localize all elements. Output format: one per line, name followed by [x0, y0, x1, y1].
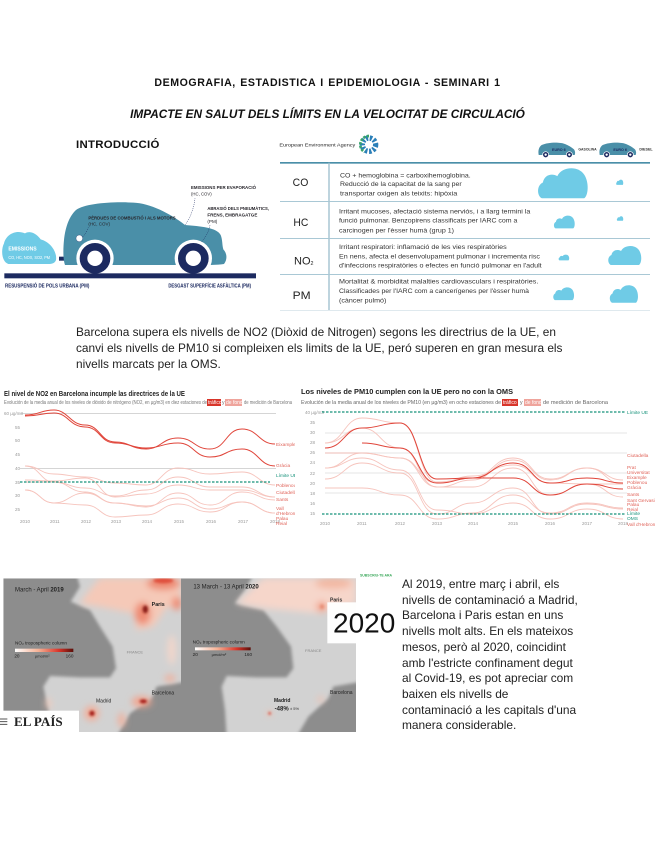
row: CO: CO + hemoglobina = carboxihemoglobina. — [340, 172, 471, 179]
chart subtitle: de fondo — [226, 400, 246, 406]
axis labels: 2017 — [582, 521, 593, 526]
axis labels: 45 — [15, 452, 21, 457]
axis labels: 2015 — [508, 521, 519, 526]
row: CO — [293, 168, 623, 198]
station labels: d'Hebron — [276, 511, 295, 517]
panel: 2019 map: 20 — [14, 653, 20, 658]
label: asphalt wear: DESGAST SUPERFÍCIE ASFÀLTICA (PM) — [168, 282, 251, 290]
icon: euro 6 diesel car — [599, 143, 636, 158]
panel: 2019 map: Madrid — [96, 699, 112, 705]
station labels: Palau — [276, 516, 289, 522]
axis labels: 2016 — [206, 519, 217, 524]
station labels: Gràcia — [276, 463, 290, 469]
axis labels: 35 — [15, 480, 21, 485]
axis labels: 28 — [310, 440, 316, 445]
axis labels: 55 — [15, 425, 21, 430]
label: evaporation — [191, 183, 256, 197]
icon: front wheel — [175, 240, 212, 277]
label: diesel: DIESEL — [639, 147, 653, 152]
station labels: Prat — [627, 465, 636, 471]
label: abrasion: FRENS, EMBRAGATGE — [207, 212, 257, 217]
row: HC: funció pulmonar. Benzopirens classificats per IARC com a — [339, 218, 518, 225]
text block: Barcelona levels — [76, 325, 562, 371]
axis labels: 50 — [15, 438, 21, 443]
strong traffic station lines — [325, 423, 623, 495]
station labels: Límite UE — [627, 410, 648, 416]
chart subtitle: y — [520, 400, 523, 406]
label: fuel losses: (HC, COV) — [88, 222, 110, 227]
station labels: Sants — [627, 492, 640, 498]
station labels: Gràcia — [627, 485, 641, 491]
axis labels — [4, 411, 281, 524]
axis labels: 25 — [15, 507, 21, 512]
panel: 2020 map: ± 5% — [290, 706, 300, 711]
axis labels: 2012 — [395, 521, 406, 526]
exhaust pipe — [59, 257, 66, 261]
axis labels — [305, 410, 629, 526]
chart subtitle: y — [222, 400, 225, 406]
map comparison: NO2 Europe 2019 vs 2020 — [0, 574, 395, 732]
panel: 2020 map: 160 — [244, 652, 253, 657]
text block: 2019 vs 2020 contamination: al Covid-19, es pot apreciar com — [402, 671, 573, 685]
axis labels: 40 µg/m3 — [305, 410, 324, 415]
axis labels: 2013 — [432, 521, 443, 526]
axis labels: 15 — [310, 511, 316, 516]
panel: 2020 map: Barcelona — [330, 690, 353, 696]
text block: Barcelona levels: canvi els nivells de PM10 si compleixen els limits de la UE, peró superen en gran mesura els — [76, 341, 562, 355]
axis labels: 20 — [310, 481, 316, 486]
table rules — [280, 162, 650, 311]
row: HC: HC — [293, 217, 308, 229]
station labels: Palau — [627, 502, 640, 508]
panel: 2019 map: Barcelona — [152, 690, 174, 696]
station labels: Sant Gervasi — [627, 498, 655, 504]
row: CO: CO — [293, 177, 308, 189]
axis labels: 2010 — [320, 521, 331, 526]
axis labels: 35 — [310, 420, 316, 425]
axis labels: 24 — [310, 460, 316, 465]
text block: 2019 vs 2020 contamination: mesos, però al 2020, coincidint — [402, 640, 566, 654]
panel: 2020 map: µmol/m² — [212, 652, 227, 657]
icon: euro 6 petrol car — [538, 143, 575, 158]
panel: 2019 map — [3, 578, 181, 732]
axis labels: 30 — [310, 430, 316, 435]
chart: PM10 levels in Barcelona — [301, 387, 655, 528]
axis labels: 2011 — [50, 519, 60, 524]
row: NO2: Irritant respiratori: inflamació de les vies respiratòries — [339, 244, 507, 251]
row: HC — [293, 208, 623, 234]
EU limit line — [20, 481, 270, 483]
panel: 2020 map: 20 — [193, 652, 198, 657]
text block: 2019 vs 2020 contamination: nivells molt alts. En els mateixos — [402, 624, 573, 638]
axis labels: 2014 — [468, 521, 479, 526]
label: abrasion: (PM) — [207, 219, 218, 224]
axis labels: 2013 — [111, 519, 122, 524]
axis labels: 40 — [15, 466, 21, 471]
row: PM — [293, 279, 638, 304]
station labels: Reial — [276, 521, 287, 527]
row: NO2: NO — [294, 255, 310, 267]
axis labels: 2012 — [81, 519, 92, 524]
label: evaporation: EMISSIONS PER EVAPORACIÓ — [191, 183, 256, 190]
row: CO: transportar oxigen als teixits: hipòxia — [340, 191, 458, 198]
diagram: car emission sources — [2, 183, 269, 290]
row: NO2: d'infeccions respiratòries o efectes en funció pulmonar en l'adult — [339, 263, 542, 270]
icon: exhaust cloud: CO, HC, NOX, SO2, PM — [8, 255, 50, 260]
axis labels: 26 — [310, 450, 316, 455]
icon: exhaust cloud — [2, 232, 56, 264]
axis labels: 2016 — [545, 521, 556, 526]
chart subtitle: tráfico — [503, 400, 517, 406]
panel: 2020 map: Madrid — [274, 698, 290, 704]
panel: 2020 map: NO₂ tropospheric column — [193, 639, 245, 644]
row: PM: Mortalitat & morbiditat malalties cardiovasculars i respiratòries. — [339, 279, 538, 286]
panel: 2019 map: March - April 2019 — [15, 588, 64, 594]
text block: Barcelona levels: nivells marcats per la OMS. — [76, 357, 221, 371]
fuel cap marker — [76, 235, 83, 242]
chart subtitle: Evolución de la media anual de los niveles de dióxido de nitrógeno (NO2, en µg/m3) en diez estaciones de — [4, 400, 207, 406]
panel: 2020 map: -48% — [275, 706, 289, 712]
icon: rear wheel — [76, 240, 114, 277]
heading: introducció: INTRODUCCIÓ — [76, 139, 160, 151]
axis labels: 2015 — [174, 519, 185, 524]
pale background station lines — [25, 466, 275, 517]
row: CO: Reducció de la capacitat de la sang per — [340, 181, 462, 188]
station labels — [276, 442, 298, 527]
axis labels: 22 — [310, 471, 316, 476]
label: evaporation: (HC, COV) — [191, 192, 212, 197]
chart subtitle: de medición de Barcelona — [543, 400, 608, 406]
table: pollutants and health effects — [279, 134, 653, 311]
icon: euro 6 diesel car: EURO 6 — [613, 148, 627, 152]
icon: car body — [63, 202, 226, 265]
chart subtitle: Evolución de la media anual de los niveles de PM10 (en µg/m3) en ocho estaciones de — [301, 400, 501, 406]
station labels: Poblenou — [627, 480, 648, 486]
station labels: Universitat — [627, 470, 650, 476]
icon: exhaust cloud: EMISSIONS — [8, 247, 37, 253]
station labels: Sants — [276, 497, 289, 503]
label: petrol: GASOLINA — [578, 147, 597, 152]
label: fuel losses — [88, 213, 176, 227]
logo: European Environment Agency — [279, 136, 376, 152]
row: NO2: En nens, afecta el desenvolupament pulmonar i incrementa risc — [339, 253, 541, 260]
axis labels: 2017 — [238, 519, 249, 524]
panel: 2020 map: FRANCE — [305, 648, 322, 653]
chart subtitle: tráfico — [208, 400, 222, 406]
road — [4, 273, 256, 278]
text block: 2019 vs 2020 contamination — [402, 577, 578, 732]
station labels: Vall — [276, 506, 284, 512]
text block: Barcelona levels: Barcelona supera els nivells de NO2 (Diòxid de Nitrogen) segons les directrius de la UE, en — [76, 325, 556, 339]
grid — [325, 433, 627, 493]
row: PM: Classificades per l'IARC com a cancerígenes per l'èsser humà — [339, 288, 529, 295]
panel: 2020 map — [181, 578, 356, 732]
logo: El País — [0, 711, 79, 733]
axis labels: 18 — [310, 491, 316, 496]
chart title: El nivel de NO2 en Barcelona incumple las directrices de la UE — [4, 389, 185, 398]
text block: 2019 vs 2020 contamination: manera considerable. — [402, 718, 516, 732]
small green link: SUBSCRIU-TE ARA — [360, 574, 393, 578]
panel: 2020 map: 13 March - 13 April 2020 — [193, 584, 259, 590]
text block: 2019 vs 2020 contamination: amb l'estricte confinament degut — [402, 656, 573, 670]
chart: NO2 levels in Barcelona — [4, 389, 295, 527]
text block: 2019 vs 2020 contamination: Barcelona i Paris estan en uns — [402, 608, 563, 622]
axis labels: 2014 — [142, 519, 153, 524]
station labels: Ciutadella — [627, 453, 649, 459]
axis labels: 30 — [15, 493, 21, 498]
leader lines — [83, 198, 210, 242]
panel: 2019 map: NO₂ tropospheric column — [15, 641, 67, 646]
chart subtitle — [301, 399, 608, 406]
station labels: Reial — [627, 507, 638, 513]
station labels: Eixample — [627, 475, 647, 481]
panel: 2019 map: µmol/m² — [35, 653, 50, 658]
row: NO2 — [294, 244, 641, 270]
text block: 2019 vs 2020 contamination: nivells de contaminació a Madrid, — [402, 593, 578, 607]
label: 2020 — [327, 602, 400, 643]
text block: 2019 vs 2020 contamination: baixen els nivells de — [402, 687, 508, 701]
axis labels: 16 — [310, 501, 316, 506]
station labels: OMS — [627, 516, 638, 522]
grid — [20, 414, 276, 468]
axis labels: 2018 — [618, 521, 629, 526]
axis labels: 2011 — [357, 521, 367, 526]
label: resuspension: RESUSPENSIÓ DE POLS URBANA (PM) — [5, 282, 90, 290]
logo: El País: EL PAÍS — [14, 715, 63, 729]
row: HC: carcinogen per l'èsser humà (grup 1) — [339, 227, 454, 234]
chart title: Los niveles de PM10 cumplen con la UE pero no con la OMS — [301, 387, 513, 396]
icon: euro 6 petrol car: EURO 6 — [552, 148, 566, 152]
subtitle: IMPACTE EN SALUT DELS LÍMITS EN LA VELOCITAT DE CIRCULACIÓ — [130, 107, 525, 121]
station labels: Límite — [627, 511, 640, 517]
strong traffic station lines — [25, 410, 275, 466]
pale background station lines — [325, 418, 623, 519]
panel: 2019 map: 160 — [66, 653, 74, 658]
chart subtitle: de fondo — [525, 400, 545, 406]
row: NO2: 2 — [310, 261, 314, 267]
panel: 2020 map: Paris — [330, 598, 342, 604]
title: DEMOGRAFIA, ESTADISTICA I EPIDEMIOLOGIA - SEMINARI 1 — [154, 77, 501, 89]
panel: 2019 map: Paris — [152, 602, 165, 608]
text block: 2019 vs 2020 contamination: Al 2019, entre març i abril, els — [402, 577, 559, 591]
station labels — [627, 410, 655, 528]
row: PM: (càncer pulmó) — [339, 297, 386, 304]
limit lines — [322, 412, 626, 514]
row: HC: Irritant mucoses, afectació sistema nerviós, i a llarg termini la — [339, 208, 531, 215]
station labels: Vall d'Hebron — [627, 522, 655, 528]
row: PM: PM — [293, 290, 311, 302]
logo: European Environment Agency: European Environment Agency — [279, 143, 356, 148]
panel: 2019 map: FRANCE — [127, 649, 143, 654]
label: abrasion — [207, 204, 269, 224]
axis labels: 2018 — [270, 519, 281, 524]
label: fuel losses: PÈRDUES DE COMBUSTIÓ I ALS MOTORS — [88, 213, 176, 220]
text block: 2019 vs 2020 contamination: contaminació a les capitals d'una — [402, 703, 576, 717]
axis labels: 60 µg/m3 — [4, 411, 23, 416]
label: 2020: 2020 — [333, 608, 395, 639]
axis labels: 2010 — [20, 519, 31, 524]
